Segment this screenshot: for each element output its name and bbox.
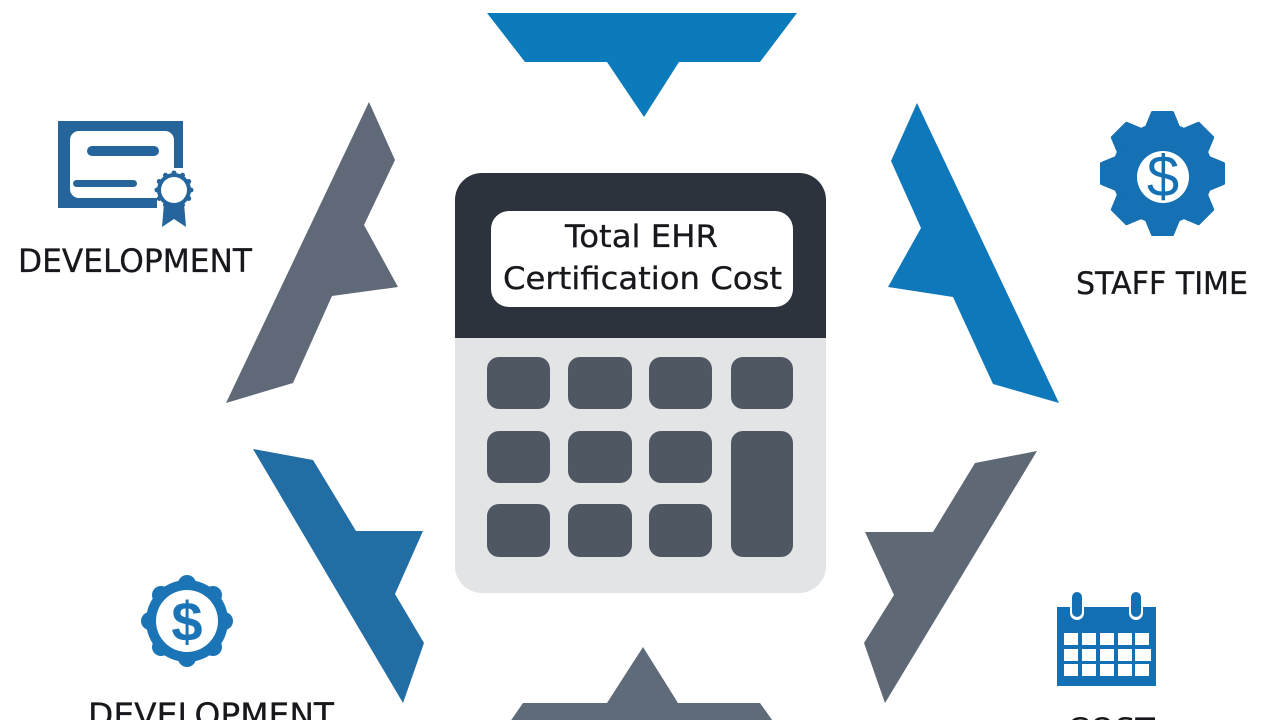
label: staff time: STAFF TIME (1076, 266, 1248, 302)
calculator body (455, 173, 826, 593)
screen text (503, 219, 782, 297)
icon: gear with dollar (1102, 112, 1224, 234)
icon: dollar badge: $ (171, 590, 203, 653)
arrow: upper left gray (226, 102, 398, 403)
calculator screen (491, 211, 793, 307)
arrow: lower left blue (253, 449, 424, 703)
label: development (top left): DEVELOPMENT (18, 242, 252, 280)
arrow: lower right gray (864, 451, 1037, 703)
icon: certificate (58, 121, 194, 227)
icon: gear with dollar: $ (1147, 144, 1179, 209)
screen text: Total EHR (564, 219, 718, 255)
calculator display housing (455, 173, 826, 338)
calculator (455, 173, 826, 593)
calculator keys (487, 357, 793, 557)
arrow: top blue (487, 13, 797, 117)
arrow: bottom gray (487, 647, 797, 720)
arrow: upper right blue (888, 103, 1059, 403)
icon: calendar (1057, 590, 1156, 686)
screen text: Certification Cost (503, 261, 782, 297)
icon: dollar badge (141, 575, 233, 667)
